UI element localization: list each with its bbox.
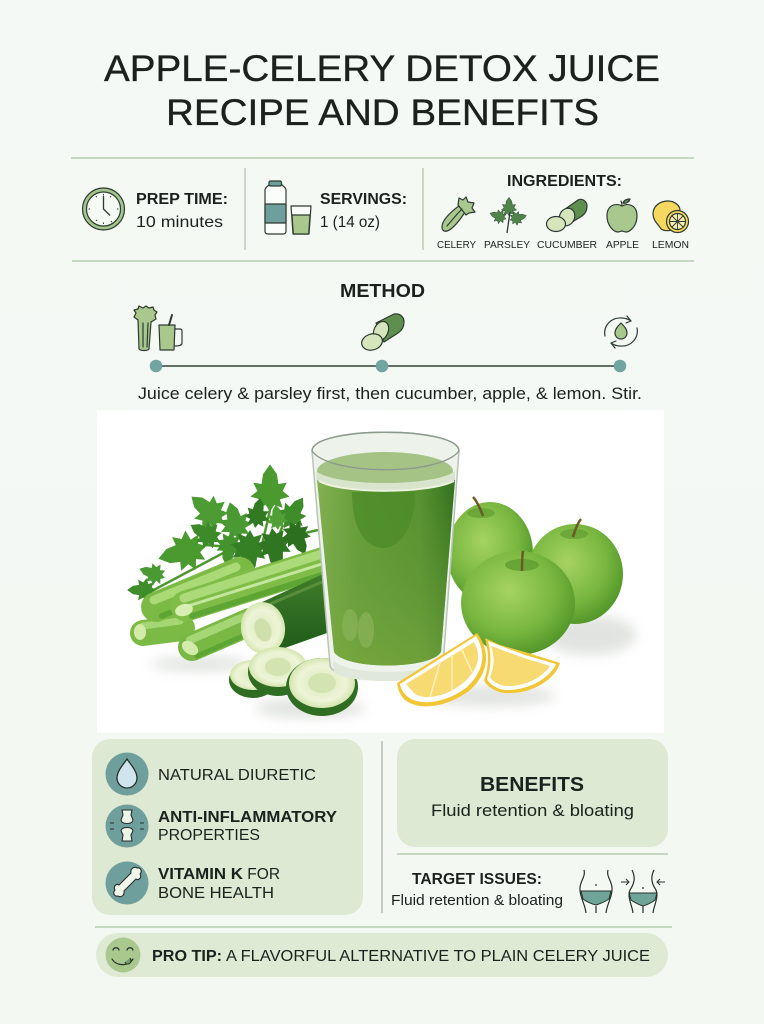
icon: bottle and glass xyxy=(265,181,311,234)
prep time text: PREP TIME: xyxy=(136,191,228,208)
title: RECIPE AND BENEFITS xyxy=(166,92,599,133)
ingredients xyxy=(437,173,689,251)
icon: stir cycle xyxy=(605,316,637,348)
servings text: SERVINGS: xyxy=(320,191,407,208)
ingredients heading: INGREDIENTS: xyxy=(507,173,622,190)
glass of green juice xyxy=(312,432,459,681)
apples xyxy=(447,497,623,655)
ingredient labels: CUCUMBER xyxy=(537,240,597,251)
icon: clock xyxy=(82,188,124,230)
icon: cucumber xyxy=(546,199,587,232)
benefits text: Fluid retention & bloating xyxy=(431,801,634,820)
vitamin k text xyxy=(158,866,280,902)
icon: bone xyxy=(106,862,148,904)
title: APPLE-CELERY DETOX JUICE xyxy=(104,48,660,89)
title xyxy=(104,48,660,133)
vitamin k text: VITAMIN K FOR xyxy=(158,866,280,883)
pro tip xyxy=(96,933,668,977)
shadows xyxy=(150,615,636,718)
ingredient labels: PARSLEY xyxy=(484,240,530,251)
panel: health properties xyxy=(92,739,363,915)
target issues text: Fluid retention & bloating xyxy=(391,893,563,909)
anti-inflammatory text xyxy=(158,809,338,844)
ingredient labels: LEMON xyxy=(652,240,689,251)
target issues xyxy=(391,870,665,913)
prep time xyxy=(82,188,228,231)
vitamin k text: BONE HEALTH xyxy=(158,885,274,902)
method heading: METHOD xyxy=(340,281,425,301)
timeline xyxy=(150,360,626,372)
cucumber slices xyxy=(229,647,358,716)
benefits heading: BENEFITS xyxy=(480,774,584,796)
icon: slim waist with arrows xyxy=(621,870,665,913)
cucumber xyxy=(238,574,327,657)
icon: sliced cucumber xyxy=(360,314,404,352)
icon: lemon xyxy=(653,201,688,232)
prep time text xyxy=(136,191,228,231)
icon: bloated waist xyxy=(580,870,612,913)
servings text xyxy=(320,191,407,231)
icon: celery and juice jug xyxy=(134,306,182,350)
icon: water drop xyxy=(106,752,148,796)
anti-inflammatory text: ANTI-INFLAMMATORY xyxy=(158,809,338,826)
icon: joint xyxy=(106,804,148,848)
icon: smiling face xyxy=(106,938,140,972)
pro tip text: A FLAVORFUL ALTERNATIVE TO PLAIN CELERY JUICE xyxy=(226,948,650,965)
pro tip text: PRO TIP: xyxy=(152,948,222,965)
servings xyxy=(265,181,407,234)
servings text: 1 (14 oz) xyxy=(320,214,380,231)
parsley xyxy=(127,464,318,602)
target issues text xyxy=(391,871,563,909)
icon: parsley xyxy=(488,197,528,233)
photo: juice with ingredients xyxy=(97,410,664,733)
lemon wedges xyxy=(397,633,560,706)
target issues text: TARGET ISSUES: xyxy=(412,871,542,888)
icon: celery xyxy=(442,197,475,231)
method section xyxy=(134,281,642,403)
celery stalks xyxy=(134,553,325,658)
icon: apple xyxy=(607,199,637,232)
ingredient labels xyxy=(437,240,689,251)
method instruction: Juice celery & parsley first, then cucumber, apple, & lemon. Stir. xyxy=(138,384,642,403)
panel: benefits xyxy=(397,739,668,847)
anti-inflammatory text: PROPERTIES xyxy=(158,827,260,844)
ingredient labels: APPLE xyxy=(606,240,639,251)
natural diuretic text: NATURAL DIURETIC xyxy=(158,767,316,784)
prep time text: 10 minutes xyxy=(136,214,223,231)
ingredient labels: CELERY xyxy=(437,240,476,251)
